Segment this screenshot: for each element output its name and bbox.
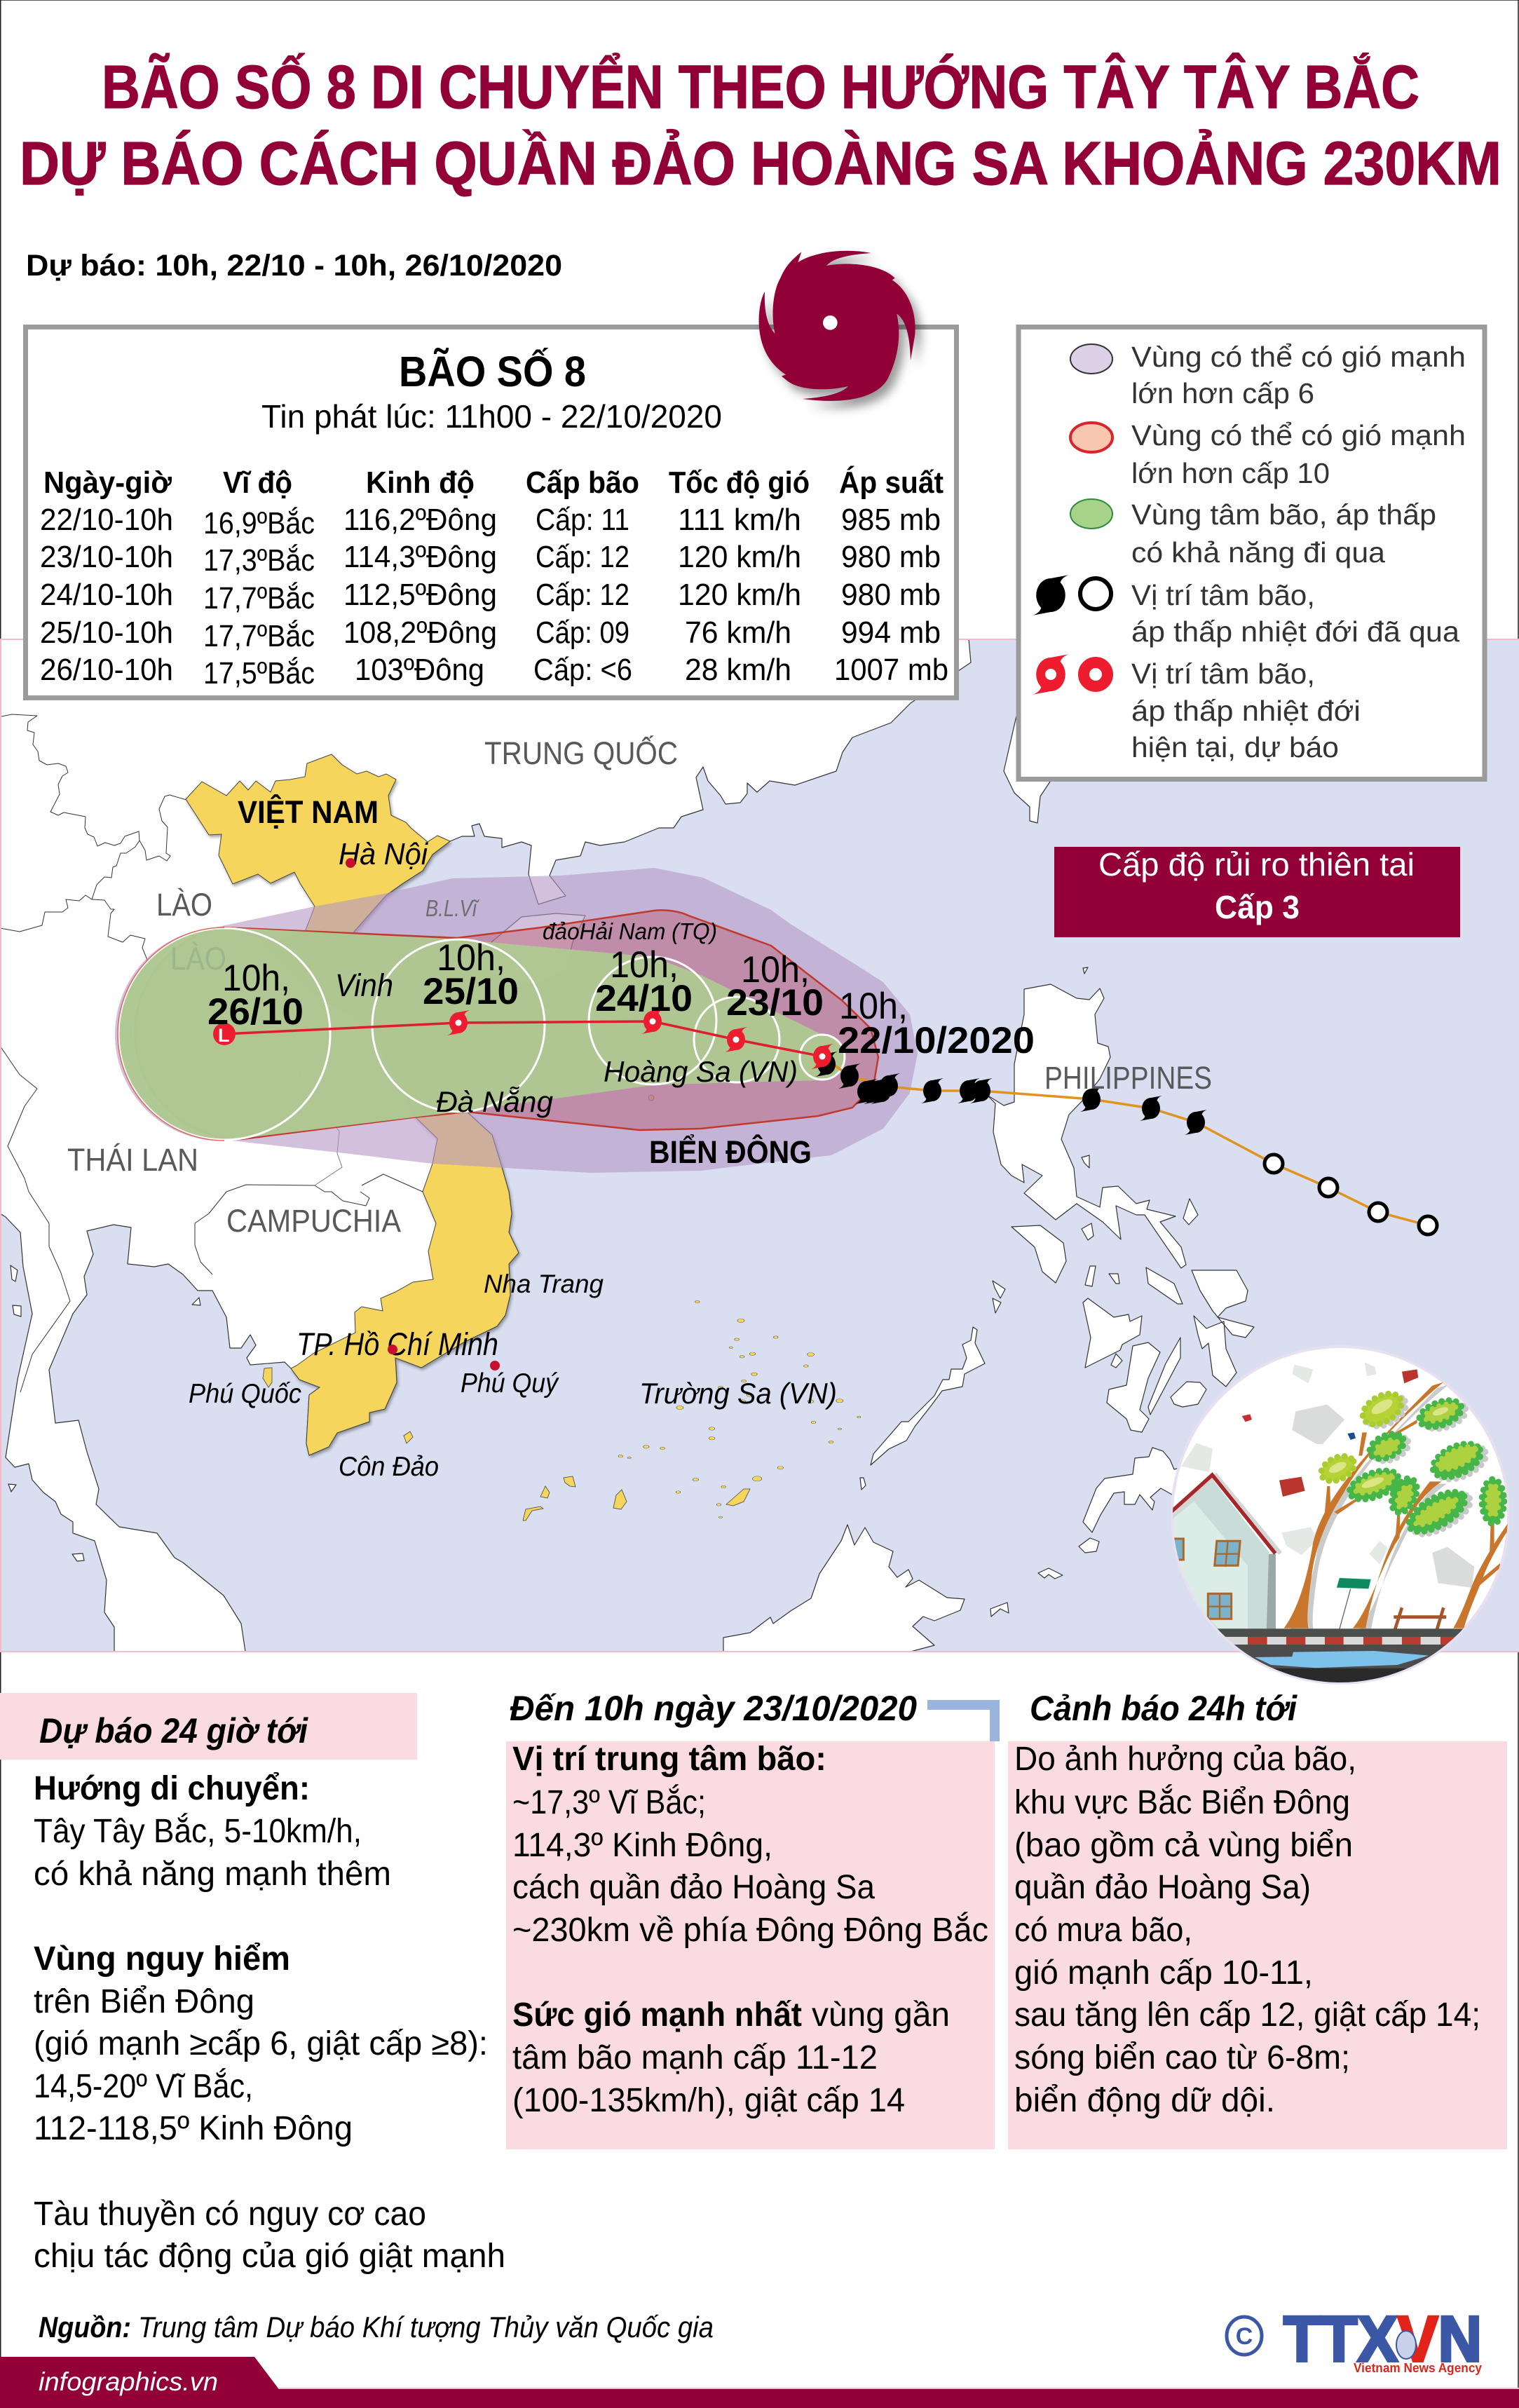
legend text: Vùng có thể có gió mạnh	[1131, 341, 1466, 373]
table rows: Cấp: <6	[533, 653, 632, 687]
date labels: 22/10/2020	[838, 1020, 1035, 1061]
map labels: countries: PHILIPPINES	[1044, 1060, 1212, 1096]
map labels: places: Hà Nội	[339, 837, 428, 871]
logo: TTXVN: TTXVN	[1283, 2304, 1482, 2375]
table rows: Cấp: 12	[536, 578, 629, 612]
panel: 24h warning: khu vực Bắc Biển Đông	[1014, 1783, 1350, 1821]
trees	[1284, 1382, 1509, 1628]
map labels: places: Côn Đảo	[339, 1452, 439, 1482]
map labels: places: B.L.Vĩ	[425, 895, 480, 921]
table rows: 22/10-10h	[40, 503, 173, 537]
map labels: places: Phú Quý	[461, 1368, 559, 1399]
date labels: 10h,	[741, 949, 810, 991]
table rows: 994 mb	[841, 615, 941, 650]
foliage	[1317, 1387, 1504, 1542]
date labels: 10h,	[437, 937, 505, 979]
date labels: 10h,	[610, 944, 679, 986]
text block: forecast details: có khả năng mạnh thêm	[34, 1856, 391, 1893]
legend swatches	[1070, 344, 1112, 374]
date labels: 10h,	[839, 986, 908, 1027]
fence	[1389, 1607, 1463, 1633]
legend text: lớn hơn cấp 6	[1131, 377, 1314, 409]
table rows: 17,7ºBắc	[203, 619, 315, 653]
forecast storm track: L	[218, 1025, 230, 1046]
logo: TTXVN: Vietnam News Agency	[1354, 2361, 1482, 2375]
table rows: 17,3ºBắc	[203, 543, 315, 578]
table rows: 24/10-10h	[40, 578, 173, 612]
table rows: 1007 mb	[834, 653, 948, 687]
legend text: lớn hơn cấp 10	[1131, 457, 1330, 489]
panel: 24h warning: sóng biển cao từ 6-8m;	[1014, 2039, 1350, 2076]
panel: storm data table	[25, 327, 956, 698]
panel: 24h warning: quần đảo Hoàng Sa)	[1014, 1869, 1311, 1906]
legend text: Vùng có thể có gió mạnh	[1131, 419, 1466, 451]
map labels: Vietnam and sea: BIỂN ĐÔNG	[649, 1134, 812, 1170]
Vietnam land	[186, 754, 519, 1455]
text block: forecast details	[34, 1770, 505, 2275]
issue time: Tin phát lúc: 11h00 - 22/10/2020	[261, 398, 722, 435]
storm zone: forecast centre track	[118, 927, 845, 1141]
table rows: Cấp: 11	[536, 503, 629, 537]
legend text	[1131, 341, 1466, 763]
table header row: Cấp bão	[526, 465, 639, 500]
table header row: Tốc độ gió	[669, 465, 810, 500]
map labels: places: Đà Nẵng	[436, 1085, 553, 1118]
icon: typhoon emblem	[759, 251, 915, 401]
forecast period: Dự báo: 10h, 22/10 - 10h, 26/10/2020	[26, 249, 562, 283]
table rows: 28 km/h	[685, 653, 791, 687]
legend text: Vùng tâm bão, áp thấp	[1131, 498, 1436, 531]
panel: 24h warning	[1008, 1741, 1507, 2149]
table rows: 985 mb	[841, 503, 941, 537]
text block: forecast details: trên Biển Đông	[34, 1983, 254, 2020]
land: Luzon	[987, 984, 1186, 1268]
panel: storm position: (100-135km/h), giật cấp 14	[512, 2082, 905, 2119]
table rows: 17,7ºBắc	[203, 581, 315, 615]
table rows: 23/10-10h	[40, 540, 173, 574]
text block: forecast details: Vùng nguy hiểm	[34, 1940, 290, 1978]
panel: 24h warning: Do ảnh hưởng của bão,	[1014, 1741, 1356, 1778]
risk level box	[1054, 846, 1460, 937]
table rows: 76 km/h	[685, 615, 791, 650]
map labels: places	[189, 837, 837, 1482]
land: Taiwan	[1004, 713, 1051, 823]
bracket connector	[927, 1705, 995, 1741]
legend text: Vị trí tâm bão,	[1131, 579, 1315, 611]
table header row: Kinh độ	[366, 465, 475, 500]
map labels: countries: THÁI LAN	[67, 1142, 198, 1178]
footer band: infographics.vn	[39, 2367, 218, 2396]
road and curb	[1217, 1628, 1464, 1682]
flying debris	[1242, 1369, 1418, 1497]
legend storm icons	[1033, 575, 1111, 695]
table rows: 16,9ºBắc	[203, 506, 315, 540]
date labels: 10h,	[222, 958, 290, 999]
table header row: Ngày-giờ	[43, 465, 172, 500]
map labels: countries: TRUNG QUỐC	[484, 735, 678, 771]
map labels: countries: CAMPUCHIA	[226, 1203, 401, 1239]
panel: storm position	[506, 1741, 995, 2149]
date labels: 23/10	[726, 982, 824, 1023]
map labels: places: Hoàng Sa (VN)	[604, 1055, 798, 1088]
land: Borneo	[723, 1525, 965, 1652]
map labels: places: Nha Trang	[484, 1270, 604, 1298]
panel: 24h warning: gió mạnh cấp 10-11,	[1014, 1954, 1313, 1992]
panel: storm position: ~230km về phía Đông Đông Bắc	[512, 1911, 988, 1949]
city dots	[346, 858, 500, 1370]
date labels: 25/10	[423, 971, 519, 1012]
tree shadows	[1289, 1385, 1449, 1631]
table rows: 116,2ºĐông	[343, 503, 497, 537]
table rows: 112,5ºĐông	[343, 578, 497, 612]
flying papers	[1181, 1362, 1474, 1588]
table header row: Vĩ độ	[223, 465, 292, 500]
date labels	[207, 937, 1035, 1061]
panel: storm position: vùng gần	[812, 1997, 950, 2034]
map labels: countries: LÀO	[156, 887, 212, 923]
land: Philippine islands	[8, 967, 1254, 1617]
table rows: 980 mb	[841, 540, 941, 574]
heading: 24h forecast	[0, 1693, 417, 1760]
heading: 24h forecast: Dự báo 24 giờ tới	[39, 1711, 308, 1750]
table rows: 25/10-10h	[40, 615, 173, 650]
storm zone: wind above level 6	[115, 868, 918, 1173]
map labels: places: Vinh	[335, 967, 393, 1003]
table rows: 26/10-10h	[40, 653, 173, 687]
logo: TTXVN: C	[1236, 2323, 1253, 2350]
panel: 24h warning: biển động dữ dội.	[1014, 2082, 1275, 2119]
forecast radius circles	[118, 928, 845, 1140]
table rows: 111 km/h	[678, 503, 801, 537]
panel: 24h warning: sau tăng lên cấp 12, giật cấp 14;	[1014, 1997, 1480, 2034]
Vietnam islands	[263, 1047, 861, 1521]
text block: forecast details: 112-118,5º Kinh Đông	[34, 2110, 353, 2147]
table rows	[40, 503, 948, 691]
legend text: có khả năng đi qua	[1131, 536, 1385, 569]
legend text: áp thấp nhiệt đới đã qua	[1131, 615, 1459, 648]
text block: forecast details: Tàu thuyền có nguy cơ cao	[34, 2196, 426, 2233]
panel: storm position: tâm bão mạnh cấp 11-12	[512, 2039, 878, 2076]
panel: 24h warning: (bao gồm cả vùng biển	[1014, 1827, 1353, 1864]
map labels: countries	[67, 735, 1212, 1239]
risk level box: Cấp 3	[1215, 889, 1300, 925]
panel: storm position: 114,3º Kinh Đông,	[512, 1827, 772, 1864]
text block: forecast details: Tây Tây Bắc, 5-10km/h,	[34, 1812, 362, 1850]
land: Asia mainland	[0, 639, 1254, 1652]
storm zone: wind above level 10	[135, 910, 878, 1139]
table header row	[43, 465, 944, 500]
map labels: Vietnam and sea: VIỆT NAM	[238, 794, 379, 830]
source: Nguồn:	[39, 2311, 131, 2344]
map labels: places: TP. Hồ Chí Minh	[297, 1326, 498, 1362]
legend text: Vị trí tâm bão,	[1131, 658, 1315, 690]
table rows: 17,5ºBắc	[203, 656, 315, 691]
date labels: 24/10	[595, 978, 693, 1019]
heading: 24h warning: Cảnh báo 24h tới	[1030, 1689, 1297, 1728]
date labels: 26/10	[207, 991, 304, 1033]
footer band	[0, 2357, 1519, 2408]
map labels: places: Phú Quốc	[189, 1379, 301, 1409]
panel: 24h warning: có mưa bão,	[1014, 1912, 1192, 1949]
map labels: places: Trường Sa (VN)	[639, 1377, 837, 1410]
panel: storm position: cách quần đảo Hoàng Sa	[512, 1869, 875, 1906]
text block: forecast details: chịu tác động của gió giật mạnh	[34, 2238, 505, 2275]
faint Laos label: LÀO	[170, 941, 226, 977]
table rows: 120 km/h	[678, 578, 801, 612]
table header row: Áp suất	[839, 465, 944, 500]
panel: storm position: Vị trí trung tâm bão:	[512, 1741, 826, 1778]
text block: forecast details: (gió mạnh ≥cấp 6, giật cấp ≥8):	[34, 2025, 488, 2062]
panel: storm position: Sức gió mạnh nhất	[512, 1997, 802, 2034]
heading: position by 10h 23/10: Đến 10h ngày 23/10/2020	[510, 1689, 917, 1728]
map	[0, 639, 1519, 1652]
text block: forecast details: Hướng di chuyển:	[34, 1770, 310, 1807]
source: Trung tâm Dự báo Khí tượng Thủy văn Quốc gia	[138, 2311, 714, 2344]
legend text: hiện tại, dự báo	[1131, 731, 1339, 763]
land: Hainan	[491, 913, 585, 985]
panel: legend	[1019, 327, 1485, 780]
table rows: 120 km/h	[678, 540, 801, 574]
title	[20, 53, 1501, 198]
illustration: storm damage scene	[1171, 1347, 1509, 1685]
table rows: Cấp: 12	[536, 540, 629, 574]
road sign	[1337, 1578, 1371, 1635]
forecast storm track	[213, 1009, 833, 1069]
table rows: Cấp: 09	[536, 615, 629, 650]
past storm track	[815, 1052, 1437, 1234]
panel: storm position: ~17,3º Vĩ Bắc;	[512, 1783, 706, 1821]
risk level box: Cấp độ rủi ro thiên tai	[1098, 846, 1415, 883]
map labels: Vietnam and sea	[238, 794, 812, 1170]
table rows: 980 mb	[841, 578, 941, 612]
map labels: places: đảoHải Nam (TQ)	[543, 918, 717, 944]
house	[1171, 1475, 1281, 1633]
table rows: 114,3ºĐông	[343, 540, 497, 574]
country borders	[0, 714, 423, 1392]
table rows: 103ºĐông	[355, 653, 484, 687]
table heading: BÃO SỐ 8	[399, 348, 586, 395]
table rows: 108,2ºĐông	[343, 615, 497, 650]
text block: forecast details: 14,5-20º Vĩ Bắc,	[34, 2067, 253, 2105]
legend text: áp thấp nhiệt đới	[1131, 695, 1361, 727]
